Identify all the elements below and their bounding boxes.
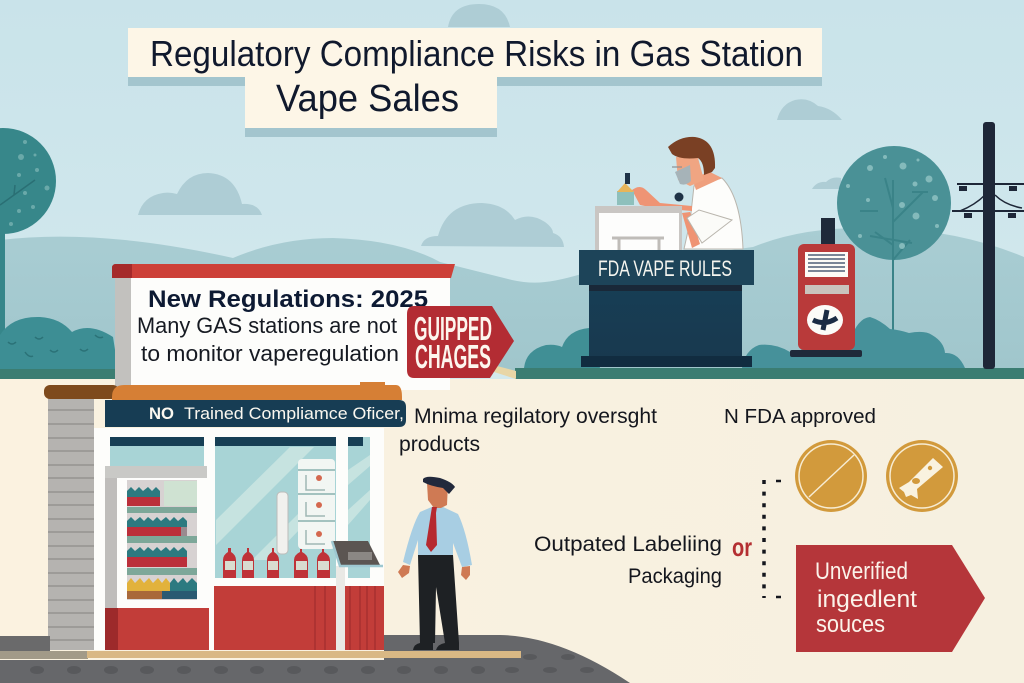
arrow panel: unverified ingredient sources bbox=[796, 545, 985, 652]
product shelves bbox=[105, 466, 207, 608]
regulator figure with mask bbox=[632, 137, 743, 249]
left bushes bbox=[0, 317, 118, 369]
store front bbox=[94, 428, 384, 650]
arrow panel: unverified ingredient sources: souces bbox=[816, 611, 885, 638]
icon: vape device circle bbox=[886, 440, 958, 512]
podium: FDA vape rules: FDA VAPE RULES bbox=[598, 256, 732, 281]
utility pole bbox=[952, 122, 1024, 369]
text: outdated labeling or packaging: or bbox=[732, 532, 752, 562]
text: outdated labeling or packaging bbox=[534, 532, 752, 588]
background hills bbox=[0, 228, 1024, 372]
title bbox=[128, 28, 822, 137]
orange roof bbox=[44, 382, 402, 400]
icon: prohibited circle bbox=[795, 440, 867, 512]
arrow badge: guipped chages: GUIPPED bbox=[414, 310, 492, 347]
dotted bracket bbox=[764, 480, 781, 598]
title: Regulatory Compliance Risks in Gas Station bbox=[150, 33, 803, 74]
ground strip bbox=[0, 369, 120, 379]
gas station store bbox=[48, 398, 384, 650]
road bbox=[0, 635, 630, 683]
counter red panels bbox=[105, 578, 384, 650]
text: no FDA approved: N FDA approved bbox=[724, 406, 876, 428]
arrow badge: guipped chages bbox=[407, 306, 514, 378]
text: minimal regulatory oversight: products bbox=[399, 433, 480, 456]
right tree bbox=[837, 146, 951, 330]
text: minimal regulatory oversight bbox=[399, 405, 657, 456]
panel: new regulations: to monitor vaperegulation bbox=[141, 341, 399, 366]
arrow panel: unverified ingredient sources: Unverified bbox=[815, 558, 908, 585]
text: outdated labeling or packaging: Packaging bbox=[628, 565, 722, 588]
left tree bbox=[0, 128, 56, 335]
text: minimal regulatory oversight: Mnima regilatory oversght bbox=[414, 405, 657, 428]
text: outdated labeling or packaging: Outpated Labeliing bbox=[534, 533, 722, 556]
background clouds bbox=[138, 4, 842, 247]
banner: no trained compliance officer: Trained Compliamce Oficer, bbox=[184, 404, 404, 423]
notices bbox=[298, 459, 335, 549]
icon: product on desk bbox=[617, 173, 634, 205]
podium: FDA vape rules bbox=[579, 250, 754, 367]
background sky bbox=[0, 0, 1024, 380]
panel: new regulations: Many GAS stations are not bbox=[137, 313, 397, 338]
payment terminal bbox=[332, 541, 383, 650]
red kiosk bbox=[790, 218, 862, 357]
title: Vape Sales bbox=[276, 78, 459, 120]
fire-red bottles bbox=[223, 548, 330, 578]
right bushes bbox=[524, 317, 965, 368]
person: officer bbox=[398, 477, 472, 650]
ground bbox=[0, 379, 1024, 683]
arrow badge: guipped chages: CHAGES bbox=[415, 338, 491, 375]
window door handle bbox=[277, 492, 288, 554]
banner: no trained compliance officer bbox=[105, 400, 406, 427]
connector to arrow badge bbox=[494, 366, 516, 379]
shutter wall bbox=[48, 398, 94, 650]
panel: new regulations bbox=[112, 264, 455, 390]
banner: no trained compliance officer: NO bbox=[149, 404, 174, 423]
panel: new regulations: New Regulations: 2025 bbox=[148, 286, 428, 313]
monitor bbox=[595, 206, 682, 250]
arrow panel: unverified ingredient sources: ingedlent bbox=[817, 586, 917, 613]
window bbox=[110, 437, 370, 578]
